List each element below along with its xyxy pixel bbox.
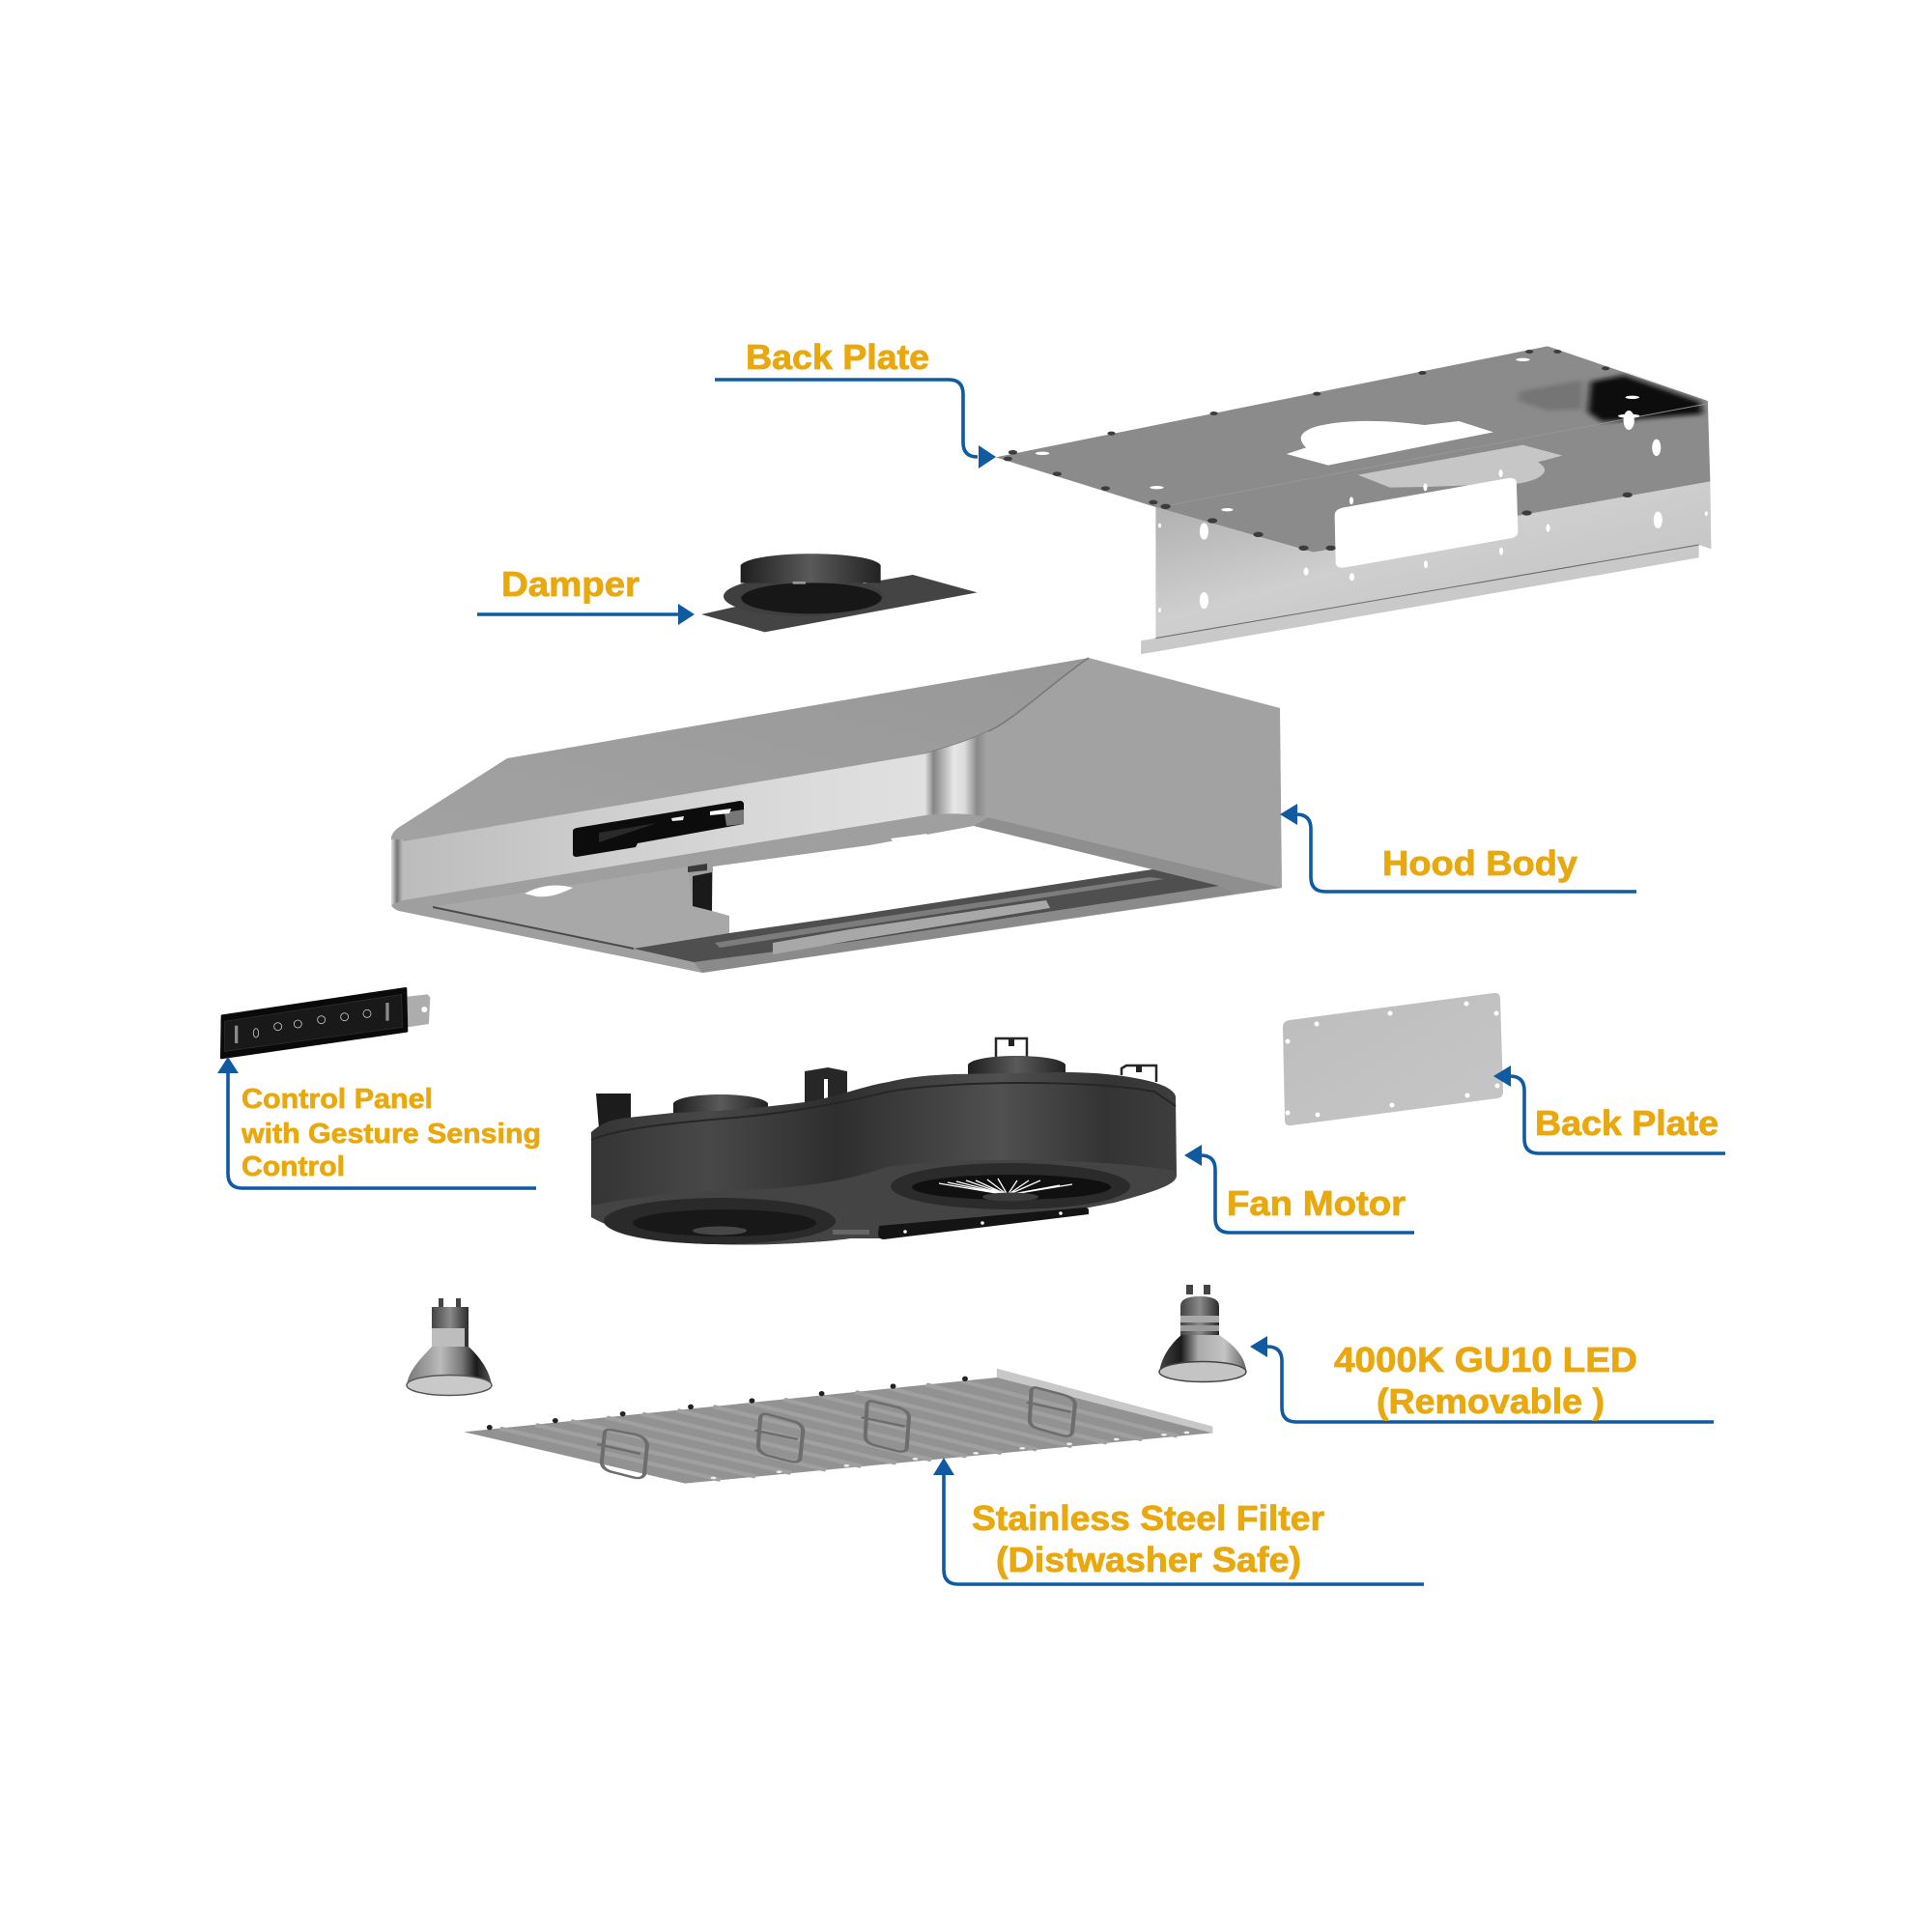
label: filter: (Distwasher Safe): [996, 1540, 1301, 1579]
component: damper: [701, 554, 978, 632]
component: right LED bulb: [1159, 1285, 1246, 1381]
label: Damper: Damper: [501, 564, 639, 604]
filter channel: [634, 869, 1219, 962]
mounting brackets: [596, 1094, 631, 1128]
component: stainless steel filter: [464, 1369, 1212, 1484]
underside frame: [391, 813, 1282, 973]
label: filter: Stainless Steel Filter: [972, 1498, 1324, 1538]
control slot: [573, 801, 744, 857]
label: control panel: with Gesture Sensing: [241, 1119, 541, 1150]
label: control panel: Control: [242, 1151, 345, 1182]
label: LED: [1334, 1340, 1637, 1421]
left fan: [604, 1198, 836, 1244]
sloped top: [391, 658, 1089, 843]
side panel: [988, 658, 1282, 888]
label: LED: (Removable ): [1377, 1381, 1605, 1421]
label: Hood Body: Hood Body: [1382, 843, 1577, 883]
component: hood body: [391, 658, 1282, 973]
housing: [591, 1072, 1177, 1244]
component: left LED bulb: [407, 1298, 492, 1395]
front strip: [403, 753, 927, 902]
label: filter: [972, 1498, 1324, 1579]
arrow: back plate small: [1493, 1065, 1725, 1153]
arrow: LED: [1250, 1336, 1714, 1422]
component: back plate (top): [996, 346, 1711, 654]
label: Fan Motor: Fan Motor: [1227, 1183, 1406, 1223]
label: control panel: [241, 1084, 541, 1182]
white opening: [712, 826, 1152, 933]
arrow: control panel: [217, 1057, 536, 1188]
top collars: [673, 1094, 768, 1113]
label: Back Plate top: Back Plate: [746, 337, 929, 377]
label: Back Plate lower: Back Plate: [1535, 1103, 1719, 1143]
label: LED: 4000K GU10 LED: [1334, 1340, 1637, 1379]
right fan: [891, 1163, 1130, 1209]
wiring hole: [525, 886, 573, 896]
underside deck: [591, 1160, 1177, 1244]
component: control panel: [221, 988, 430, 1058]
arrow: back plate top: [715, 380, 996, 469]
mounting bar: [878, 1208, 1089, 1239]
component: fan motor: [591, 1038, 1177, 1244]
bracket: [693, 872, 712, 911]
component: back plate (small): [1283, 993, 1503, 1125]
arrow: damper: [477, 604, 695, 625]
arrow: filter: [933, 1458, 1424, 1584]
arrow: hood body: [1280, 804, 1636, 892]
label: control panel: Control Panel: [242, 1084, 433, 1115]
arrow: fan motor: [1184, 1145, 1414, 1233]
